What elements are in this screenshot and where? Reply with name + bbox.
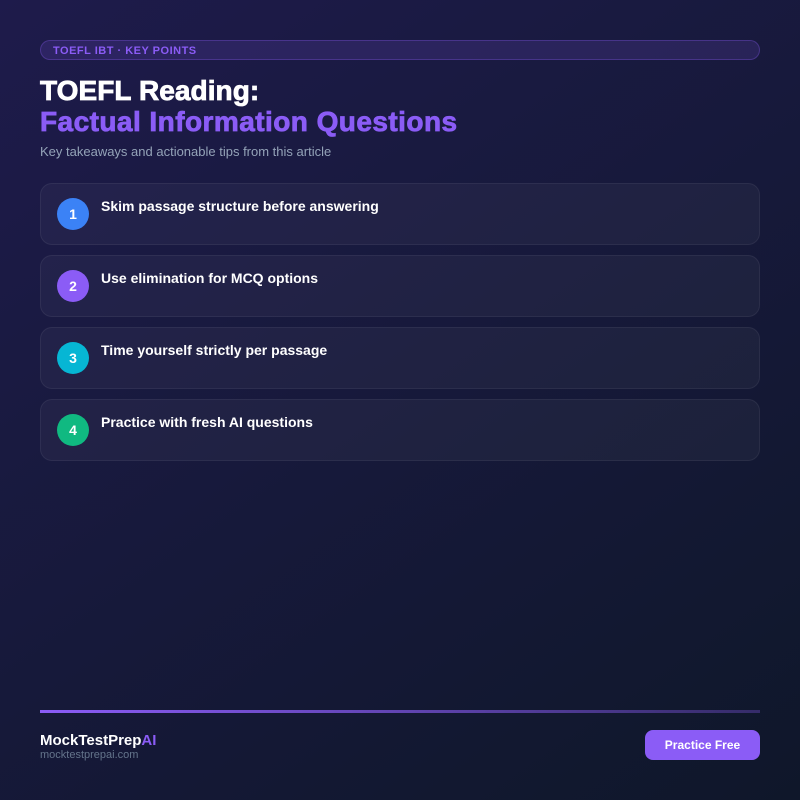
key point 3 text: Time yourself strictly per passage xyxy=(101,342,327,358)
footer accent bar xyxy=(40,710,760,713)
card: key point 4 xyxy=(40,399,760,461)
card: key point 1 xyxy=(40,183,760,245)
brand url: mocktestprepai.com xyxy=(40,749,138,761)
call-to-action button xyxy=(645,730,760,760)
title: Factual Information Questions xyxy=(40,106,458,137)
number badge 2: 2 xyxy=(69,278,77,294)
key point 4 text: Practice with fresh AI questions xyxy=(101,414,313,430)
category pill xyxy=(40,40,760,60)
number badge 3: 3 xyxy=(69,350,77,366)
key point 1 text: Skim passage structure before answering xyxy=(101,198,379,214)
card: key point 3 xyxy=(40,327,760,389)
title xyxy=(40,75,458,137)
number badge 1: 1 xyxy=(69,206,77,222)
number badge 3 xyxy=(57,342,89,374)
card: key point 2 xyxy=(40,255,760,317)
key point 2 text: Use elimination for MCQ options xyxy=(101,270,318,286)
footer brand xyxy=(40,732,156,761)
brand name: MockTestPrepAI xyxy=(40,732,156,749)
title: TOEFL Reading: xyxy=(40,75,259,106)
number badge 1 xyxy=(57,198,89,230)
subtitle: Key takeaways and actionable tips from this article xyxy=(40,144,331,159)
number badge 2 xyxy=(57,270,89,302)
number badge 4 xyxy=(57,414,89,446)
category pill: TOEFL IBT · KEY POINTS xyxy=(53,45,197,57)
call-to-action button: Practice Free xyxy=(665,738,740,752)
number badge 4: 4 xyxy=(69,422,77,438)
